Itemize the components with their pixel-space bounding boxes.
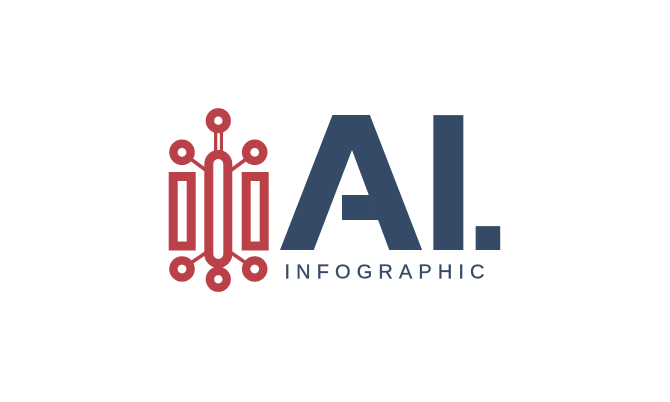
wordmark: AI.: . [464, 106, 512, 284]
left bar [173, 176, 191, 246]
central capsule [209, 154, 228, 264]
wordmark: AI.: I [419, 73, 477, 292]
node circles [173, 112, 263, 288]
wordmark: AI.: A [278, 76, 424, 289]
wordmark: AI. [270, 73, 512, 292]
right bar [246, 176, 264, 246]
subtitle: INFOGRAPHIC [284, 261, 484, 283]
top stem [214, 130, 223, 152]
connector lines [188, 157, 249, 272]
icon: circuit emblem [173, 112, 264, 288]
